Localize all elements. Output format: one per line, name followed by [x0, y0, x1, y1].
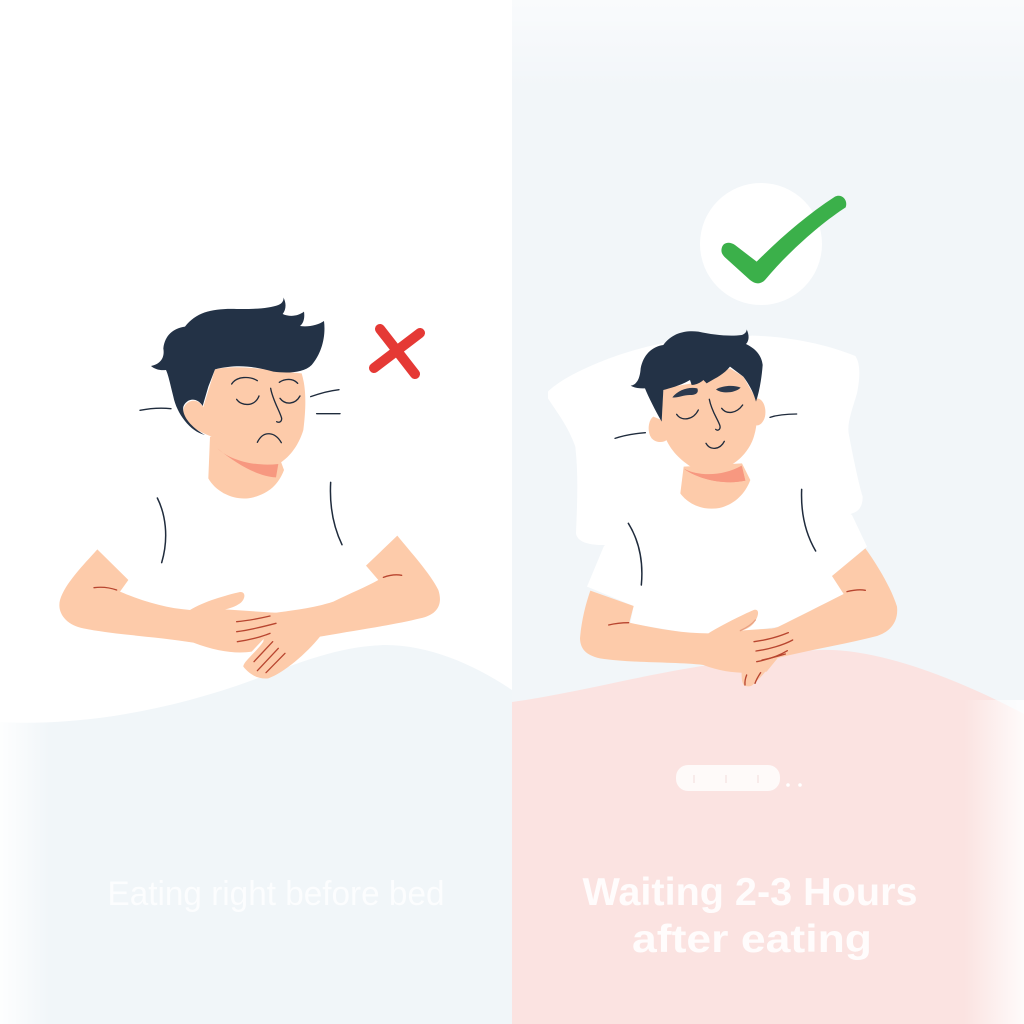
- person: restless sleeper body: [59, 482, 440, 678]
- shirt creases: [628, 489, 816, 585]
- right arm and hand: [243, 536, 440, 678]
- person: restful sleeper head: [615, 329, 797, 482]
- neck: [680, 463, 750, 509]
- blanket: right panel: [512, 650, 1024, 1024]
- caption: eating right before bed: Eating right before bed: [108, 875, 444, 913]
- fingers under hand: [742, 670, 767, 686]
- pill body: [676, 765, 780, 791]
- neck: [208, 437, 284, 498]
- ear: [183, 401, 217, 437]
- hand and elbow lines: [94, 575, 402, 673]
- face lines: [140, 377, 340, 443]
- caption: waiting 2-3 hours after eating: after eating: [632, 918, 872, 961]
- pillow: [548, 336, 863, 553]
- face lines: [615, 399, 797, 448]
- neck shadow: [684, 467, 745, 482]
- neck shadow overlay: [684, 466, 745, 482]
- face: [662, 368, 757, 471]
- badge circle: [700, 183, 822, 305]
- neck shadow: [217, 448, 278, 477]
- shirt creases: [157, 482, 342, 563]
- left arm and hand: [580, 591, 787, 673]
- face: [203, 367, 305, 465]
- right arm: [752, 548, 897, 660]
- panel: eating right before bed: [0, 0, 512, 1024]
- edge fade: left panel: [0, 700, 50, 1024]
- hair: [151, 297, 324, 435]
- caption: waiting 2-3 hours after eating: [582, 871, 918, 961]
- top fade: [512, 0, 1024, 90]
- right ear: [755, 398, 765, 425]
- check mark: [721, 196, 846, 283]
- panel: waiting 2-3 hours: [512, 0, 1024, 1024]
- left arm and hand: [59, 549, 278, 653]
- icon badge: green check: [700, 183, 846, 305]
- eyebrows: [672, 386, 741, 398]
- person: restful sleeper body: [548, 336, 897, 686]
- progress pill: [676, 765, 802, 791]
- pill ticks: [694, 775, 758, 783]
- trailing dots: [786, 783, 790, 787]
- icon: red cross: [374, 329, 420, 374]
- shirt: [587, 479, 867, 637]
- hand and elbow lines: [609, 590, 865, 685]
- edge fade: right panel: [964, 700, 1024, 1024]
- person: restless sleeper head: [140, 297, 340, 498]
- hair: [631, 329, 763, 422]
- caption: waiting 2-3 hours after eating: Waiting 2-3 Hours: [582, 871, 918, 914]
- blanket: left panel: [0, 645, 512, 1024]
- left ear: [649, 417, 667, 442]
